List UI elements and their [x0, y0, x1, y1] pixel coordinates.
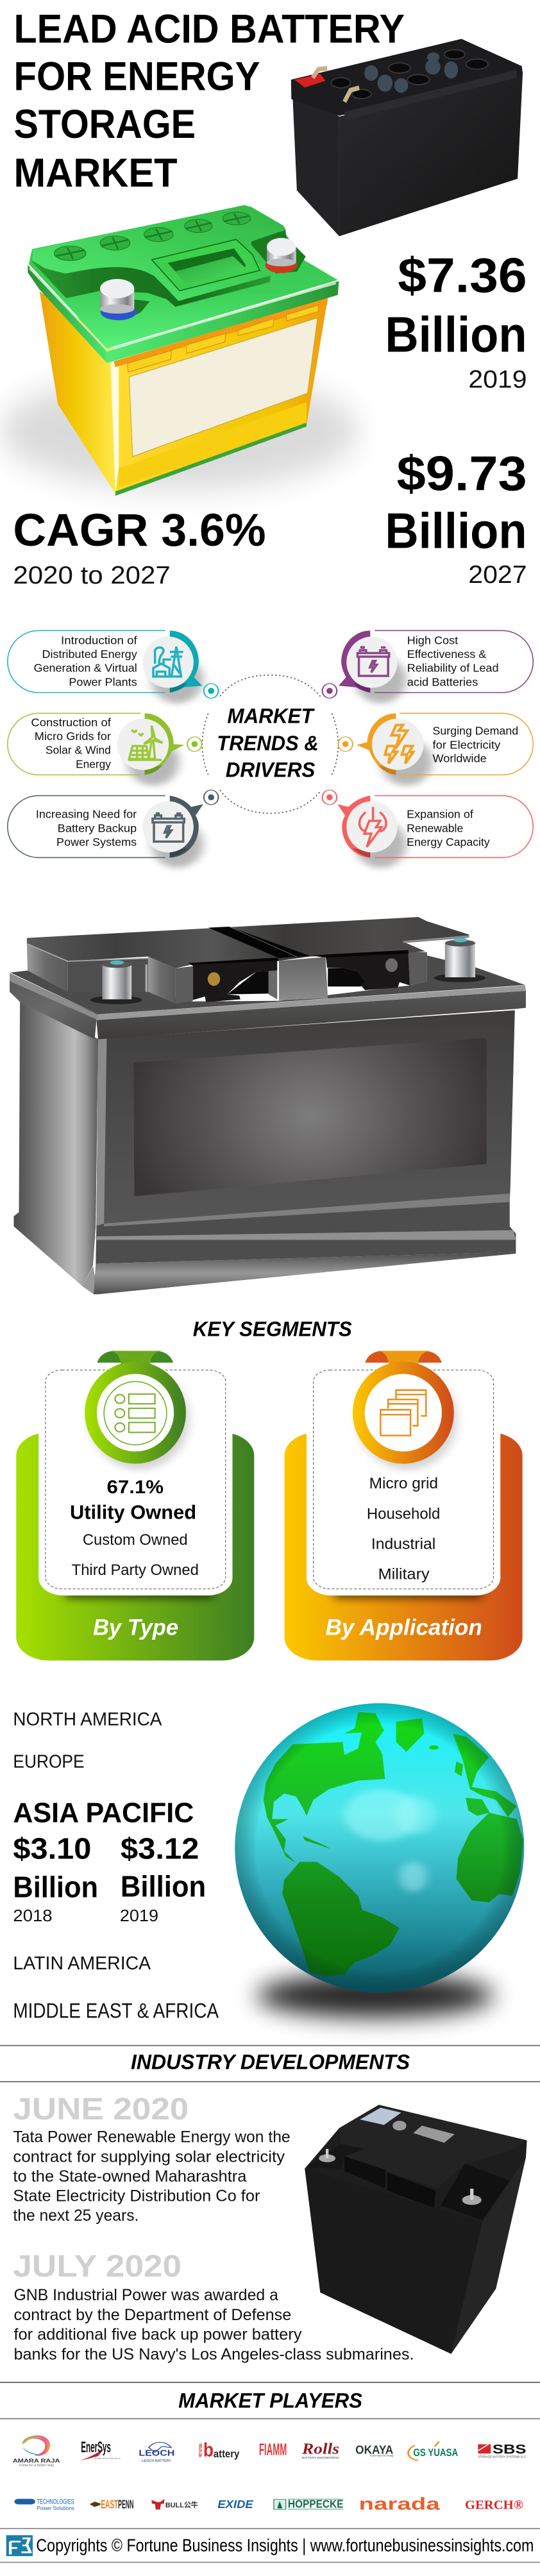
section: regions: [13, 1703, 524, 1992]
icon: lightning bolts: [385, 725, 413, 764]
logo: Bull: [151, 2499, 198, 2509]
text: application segments: Industrial: [371, 1535, 435, 1553]
logo: First National Battery: FIRST NATIONAL: [199, 2443, 204, 2457]
heading: market players: MARKET PLAYERS: [178, 2389, 362, 2412]
text: asia pacific stats: Billion: [121, 1870, 206, 1903]
stat: 2027 market size: [385, 447, 527, 588]
text: type segments: [70, 1476, 199, 1579]
text: renewable capacity: [407, 809, 490, 848]
text: asia pacific stats: ASIA PACIFIC: [13, 1797, 194, 1828]
logo: East Penn: [90, 2498, 133, 2511]
logo: GS Yuasa: [408, 2441, 458, 2461]
logo: C&D Technologies: [15, 2498, 74, 2511]
text: micro grids: Energy: [76, 759, 111, 771]
image: black VRLA battery: [305, 2105, 527, 2354]
text: renewable capacity: Renewable: [407, 822, 463, 835]
text: asia pacific stats: [13, 1797, 206, 1925]
heading: market trends and drivers: [217, 705, 319, 782]
icon: power plant and pylon: [153, 646, 183, 677]
logo: Amara Raja: AMARA RAJA: [13, 2458, 60, 2464]
logo: Bull: BULL公牛: [165, 2501, 198, 2509]
text: june 2020 development: the next 25 years.: [13, 2206, 139, 2225]
text: type segments: 67.1%: [106, 1476, 164, 1497]
stat: 2027 market size: $9.73: [397, 447, 527, 501]
shadow: globe ground shadow: [257, 1974, 494, 2017]
map: continents: [264, 1712, 523, 1976]
text: battery backup: Battery Backup: [58, 822, 137, 835]
text: july 2020 development: for additional five back up power battery: [13, 2325, 302, 2343]
text: electricity demand: [432, 725, 518, 765]
label: by application: By Application: [325, 1615, 482, 1640]
logo: Rolls: Rolls: [301, 2440, 339, 2457]
text: cost effectiveness: acid Batteries: [407, 676, 478, 689]
panel: distributed energy driver: [8, 630, 218, 703]
heading: market trends and drivers: MARKET: [227, 705, 315, 728]
stat: 2027 market size: 2027: [468, 560, 527, 588]
logo: Rolls: [301, 2440, 339, 2459]
icon: wind turbine and solar panel: [128, 726, 162, 760]
connector dotted arcs: [202, 675, 338, 813]
text: june 2020 development: JUNE 2020: [13, 2092, 189, 2126]
logo: Amara Raja: Gotta be a better way: [19, 2464, 54, 2467]
panel: by type: [16, 1351, 254, 1660]
text: june 2020 development: [13, 2092, 291, 2225]
section: market players and footer: TECHNOLOGIES: [37, 2498, 74, 2506]
stat: 2019 market size: Billion: [385, 307, 527, 362]
text: asia pacific stats: 2019: [120, 1907, 158, 1925]
logo: Hoppecke: [274, 2498, 343, 2510]
label: by type: By Type: [93, 1615, 178, 1640]
image: black sealed battery: [291, 39, 523, 236]
text: asia pacific stats: $3.10: [13, 1832, 91, 1865]
text: type segments: Third Party Owned: [72, 1562, 199, 1579]
image: large grey battery: [10, 917, 526, 1294]
text: application segments: Micro grid: [369, 1474, 438, 1492]
text: application segments: Household: [367, 1505, 440, 1522]
panel: renewable capacity driver: [323, 790, 533, 868]
logo: Okaya: OKAYA: [355, 2443, 393, 2457]
heading: industry developments: INDUSTRY DEVELOPMENTS: [131, 2051, 410, 2074]
section: key segments: [16, 1318, 523, 1660]
text: battery backup: [36, 809, 137, 848]
title: STORAGE: [13, 101, 196, 147]
text: july 2020 development: [13, 2249, 414, 2363]
logo: First National Battery: [199, 2439, 240, 2461]
text: distributed energy: Power Plants: [69, 676, 137, 689]
text: july 2020 development: contract by the Department of Defense: [13, 2305, 291, 2324]
icon: battery: [357, 646, 389, 676]
text: renewable capacity: Expansion of: [407, 809, 473, 821]
section: market trends and drivers: [8, 630, 533, 868]
stat: 2019 market size: 2019: [468, 366, 527, 393]
text: electricity demand: for Electricity: [432, 739, 500, 752]
text: distributed energy: Generation & Virtual: [34, 662, 137, 675]
section: market players and footer: FIAMM: [259, 2440, 287, 2459]
logo: Rolls: BATTERY ENGINEERING: [302, 2457, 339, 2459]
logo: Okaya: [355, 2443, 393, 2457]
text: application segments: Military: [378, 1565, 430, 1583]
section: market players and footer: EnerSys: [81, 2438, 111, 2455]
text: july 2020 development: JULY 2020: [13, 2249, 181, 2284]
text: renewable capacity: Energy Capacity: [407, 836, 490, 848]
logo: Narada: narada: [359, 2494, 441, 2513]
panel: micro grids driver: [8, 713, 202, 786]
text: asia pacific stats: Billion: [13, 1871, 98, 1904]
logo: EnerSys: [80, 2438, 121, 2461]
section: middle east and industry developments: [0, 1999, 540, 2363]
section: market players and footer: GS YUASA: [413, 2446, 458, 2459]
logo: Fortune Business Insights: [6, 2535, 33, 2556]
text: distributed energy: Introduction of: [61, 634, 137, 647]
text: june 2020 development: State Electricity Distribution Co for: [13, 2187, 260, 2205]
title: LEAD ACID BATTERY: [13, 6, 405, 51]
text: asia pacific stats: $3.12: [121, 1832, 199, 1865]
text: micro grids: Micro Grids for: [35, 730, 111, 743]
text: cost effectiveness: [407, 634, 499, 689]
text: micro grids: [31, 717, 111, 771]
title: [13, 6, 405, 196]
icon: renewable power bolt: [359, 807, 386, 847]
text: cost effectiveness: Effectiveness &: [407, 648, 486, 661]
text: cost effectiveness: High Cost: [407, 634, 459, 647]
text: june 2020 development: contract for supplying solar electricity: [13, 2147, 285, 2166]
logo: Amara Raja: [13, 2436, 60, 2467]
image: green and yellow car battery: [0, 205, 358, 496]
logo: Okaya: Chalti Hawa Hai Zindagi: [370, 2455, 393, 2457]
image: globe: [235, 1703, 524, 1992]
section: header and market size: [13, 6, 527, 589]
badge: list icon: [85, 1351, 189, 1470]
logo: SBS: SBS: [493, 2442, 527, 2456]
stat: 2019 market size: [385, 249, 527, 393]
heading: market trends and drivers: DRIVERS: [226, 759, 315, 782]
title: MARKET: [13, 150, 178, 196]
text: battery backup: Increasing Need for: [36, 809, 137, 821]
text: type segments: Custom Owned: [83, 1531, 188, 1549]
logo: C&D Technologies: Power Solutions: [37, 2505, 74, 2511]
stat: CAGR: CAGR 3.6%: [13, 505, 266, 556]
text: june 2020 development: to the State-owned Maharashtra: [13, 2167, 247, 2185]
text: latin america: LATIN AMERICA: [13, 1953, 151, 1974]
text: distributed energy: Distributed Energy: [42, 648, 137, 661]
logo: Exide: EXIDE: [217, 2498, 253, 2511]
text: june 2020 development: Tata Power Renewable Energy won the: [13, 2128, 291, 2146]
panel: cost effectiveness restraint: [323, 630, 533, 703]
panel: battery backup driver: [8, 790, 218, 868]
stat: CAGR: [13, 505, 266, 589]
text: asia pacific stats: 2018: [13, 1907, 53, 1925]
text: july 2020 development: GNB Industrial Power was awarded a: [13, 2286, 279, 2304]
panel: electricity demand driver: [338, 713, 533, 786]
stat: 2019 market size: $7.36: [398, 249, 527, 303]
logo: Leoch: LEOCH: [139, 2448, 174, 2457]
text: electricity demand: Worldwide: [432, 753, 487, 765]
stat: 2027 market size: Billion: [385, 503, 527, 559]
text: micro grids: Construction of: [31, 717, 111, 729]
logo: Hoppecke: HOPPECKE: [288, 2498, 343, 2510]
panel: by application: [285, 1351, 523, 1660]
stat: CAGR: 2020 to 2027: [13, 560, 171, 589]
text: type segments: Utility Owned: [70, 1501, 196, 1523]
logo: Leoch: LEOCH BATTERY: [142, 2459, 171, 2462]
logo: EnerSys: Power/Full Solutions: [95, 2457, 121, 2459]
heading: key segments: KEY SEGMENTS: [193, 1318, 352, 1341]
text: micro grids: Solar & Wind: [46, 745, 111, 757]
text: battery backup: Power Systems: [56, 836, 137, 848]
text: europe: EUROPE: [13, 1752, 85, 1772]
text: north america: NORTH AMERICA: [13, 1710, 162, 1730]
section: market players and footer: PENN: [118, 2498, 133, 2511]
section: market players and footer: [0, 2382, 540, 2563]
text: distributed energy: [34, 634, 137, 689]
icon: battery: [153, 812, 184, 841]
logo: First National Battery: b: [203, 2439, 214, 2461]
text: application segments: [367, 1474, 440, 1583]
logo: SBS: [478, 2442, 527, 2459]
badge: windows icon: [353, 1351, 457, 1470]
title: FOR ENERGY: [13, 53, 260, 99]
logo: Leoch: [139, 2443, 174, 2462]
logo: First National Battery: attery: [214, 2448, 240, 2460]
heading: market trends and drivers: TRENDS &: [217, 732, 319, 755]
text: middle east and africa: MIDDLE EAST & AFRICA: [13, 1999, 219, 2023]
logo: East Penn: EAST: [101, 2498, 118, 2511]
